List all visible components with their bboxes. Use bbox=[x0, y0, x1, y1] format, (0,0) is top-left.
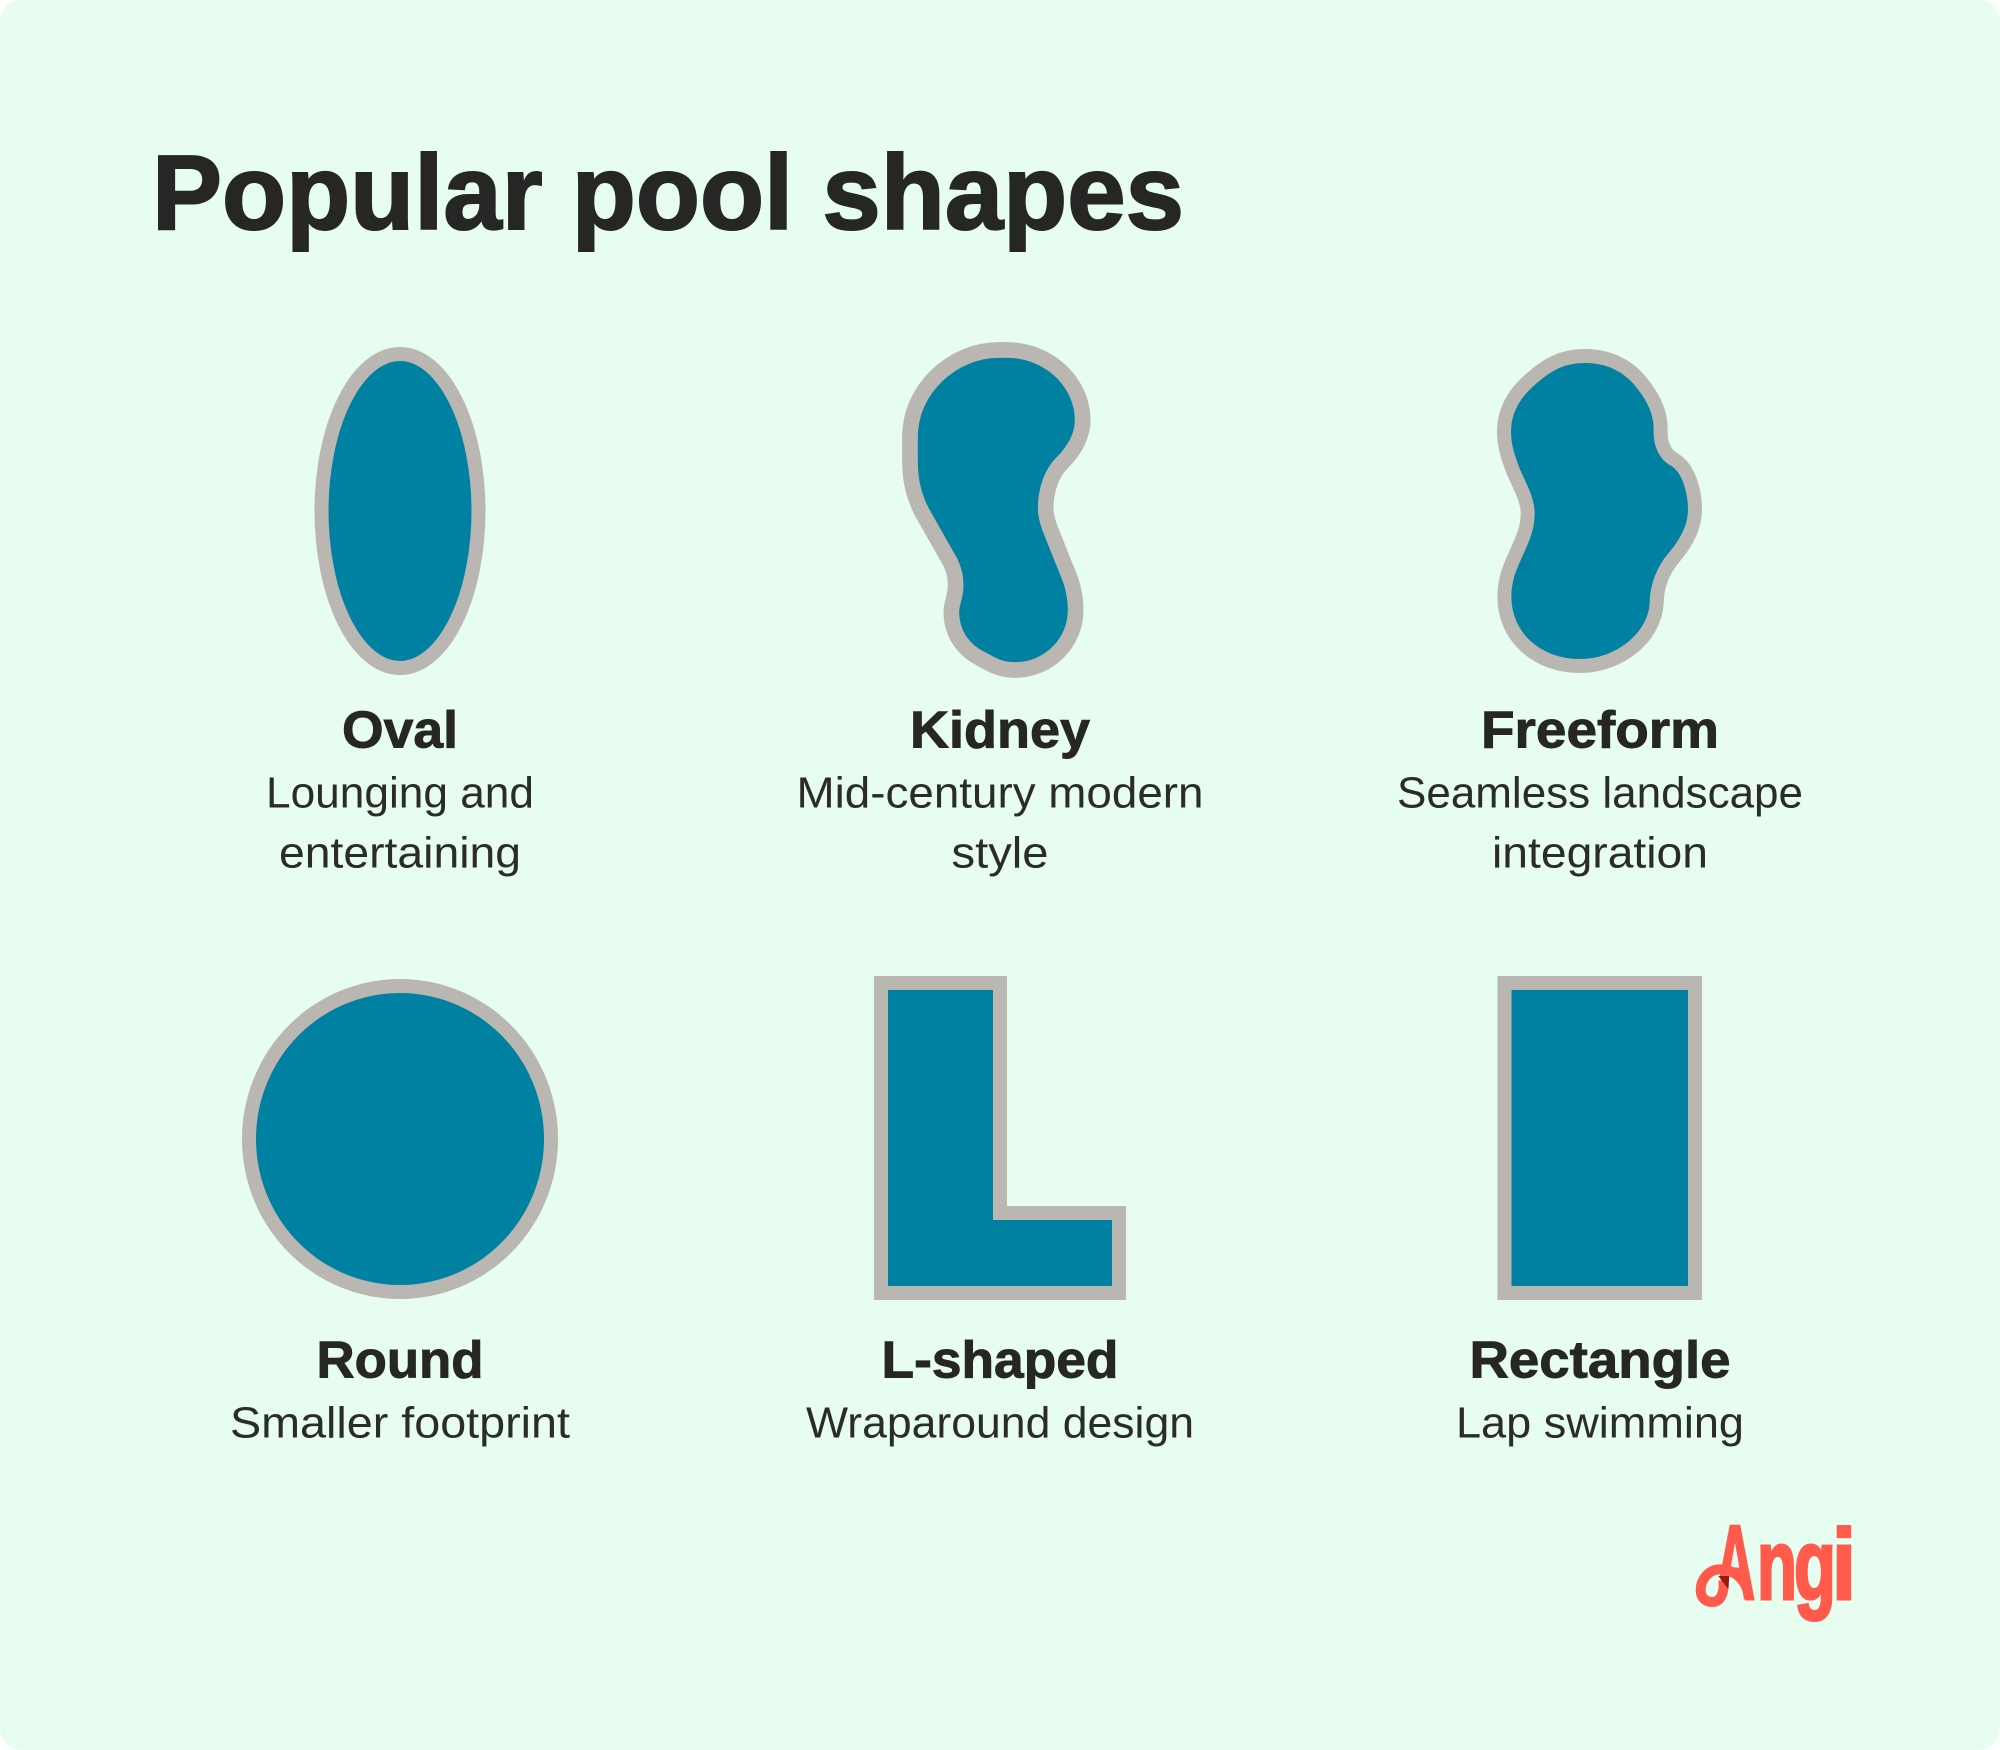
panel: rectangle pool bbox=[1456, 983, 1744, 1448]
label: rectangle: Rectangle bbox=[1470, 1332, 1730, 1390]
description: kidney: Mid-century modern bbox=[796, 768, 1204, 818]
logo: Angi: i bbox=[1832, 1509, 1856, 1621]
description: oval bbox=[266, 768, 534, 878]
icon: rectangle pool shape bbox=[1504, 983, 1695, 1293]
logo: Angi bbox=[1701, 1504, 1856, 1622]
label: round: Round bbox=[316, 1332, 484, 1390]
label: oval: Oval bbox=[342, 702, 458, 760]
label: L-shaped: L-shaped bbox=[882, 1332, 1118, 1390]
logo: Angi: g bbox=[1794, 1509, 1836, 1621]
description: kidney: style bbox=[952, 828, 1048, 878]
description: kidney bbox=[796, 768, 1204, 878]
label: kidney: Kidney bbox=[910, 702, 1090, 760]
panel: round pool bbox=[230, 986, 570, 1448]
title: Popular pool shapes bbox=[152, 134, 1184, 252]
panel: L-shaped pool bbox=[806, 983, 1194, 1448]
logo: Angi: n bbox=[1757, 1509, 1797, 1621]
description: oval: Lounging and bbox=[266, 768, 534, 818]
panel: kidney pool bbox=[796, 350, 1204, 878]
icon: freeform pool shape bbox=[1504, 356, 1695, 666]
label: freeform: Freeform bbox=[1481, 702, 1719, 760]
icon: kidney pool shape bbox=[910, 350, 1083, 670]
description: round: Smaller footprint bbox=[230, 1398, 570, 1448]
description: L-shaped: Wraparound design bbox=[806, 1398, 1194, 1448]
logo: Angi: A bbox=[1715, 1504, 1755, 1622]
panel: freeform pool bbox=[1397, 356, 1803, 877]
icon: L-shaped pool shape bbox=[881, 983, 1119, 1293]
description: freeform: integration bbox=[1492, 828, 1708, 878]
description: freeform bbox=[1397, 768, 1803, 878]
description: oval: entertaining bbox=[279, 828, 521, 878]
icon: round pool shape bbox=[249, 986, 551, 1292]
description: freeform: Seamless landscape bbox=[1397, 768, 1803, 818]
description: rectangle: Lap swimming bbox=[1456, 1398, 1744, 1448]
panel: oval pool bbox=[266, 354, 534, 878]
icon: oval pool shape bbox=[322, 354, 478, 668]
